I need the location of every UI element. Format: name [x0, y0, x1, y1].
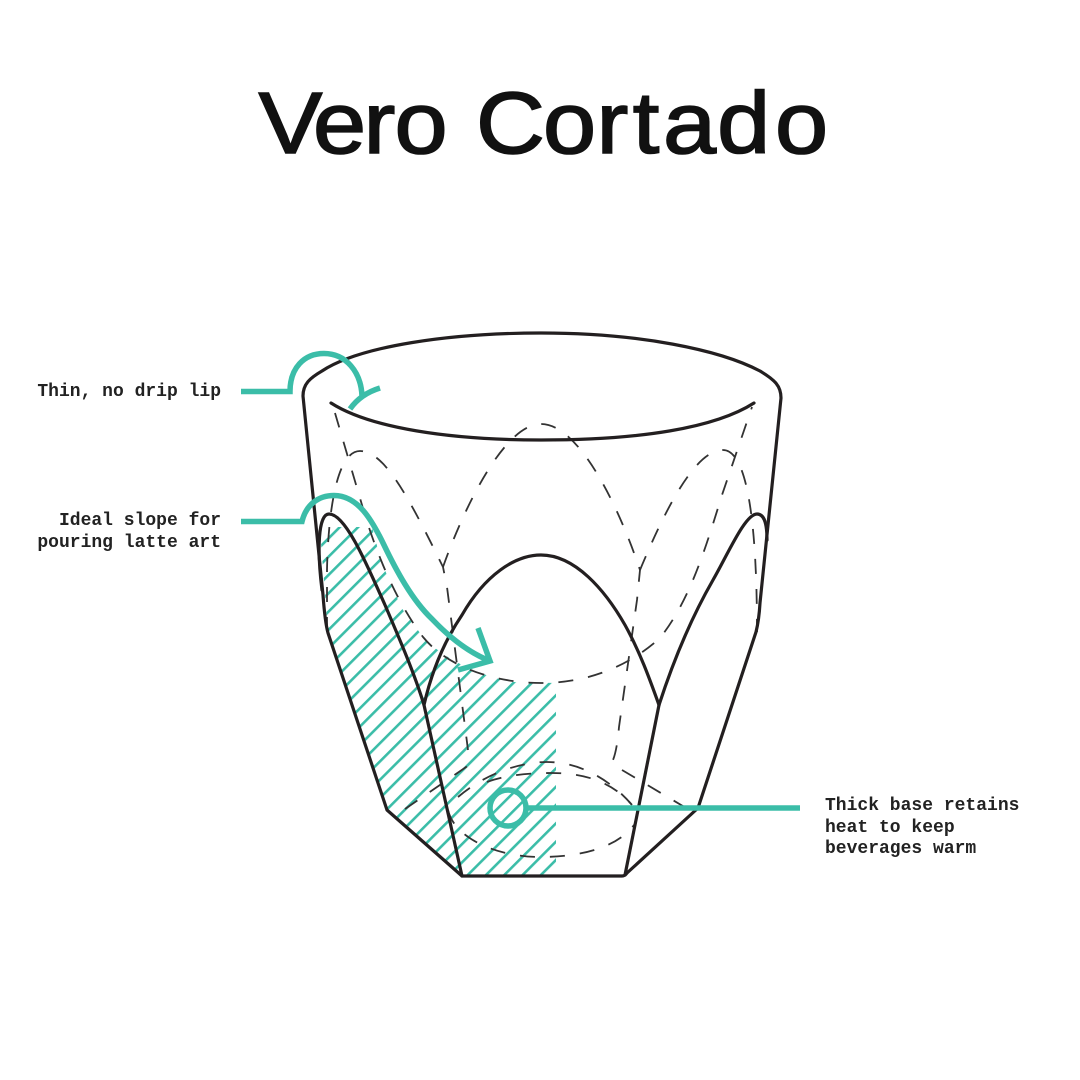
- illustration: cup: [303, 333, 781, 876]
- label: slope: pouring latte art: [37, 533, 221, 553]
- label: base: heat to keep: [825, 818, 955, 838]
- dashed hidden contours of cup: [327, 407, 757, 857]
- label: lip: Thin, no drip lip: [37, 382, 221, 402]
- title: Vero Cortado: [259, 75, 828, 172]
- label: slope: [37, 511, 221, 553]
- callout arrow: slope: [241, 496, 490, 670]
- solid outline of cup: [303, 333, 781, 876]
- label: base: beverages warm: [825, 839, 976, 859]
- callout marker: base: [490, 790, 800, 826]
- hatched thick glass area: [320, 527, 556, 876]
- label: slope: Ideal slope for: [59, 511, 221, 531]
- label: base: [825, 796, 1019, 859]
- label: base: Thick base retains: [825, 796, 1019, 816]
- callout arrow: lip: [241, 354, 380, 409]
